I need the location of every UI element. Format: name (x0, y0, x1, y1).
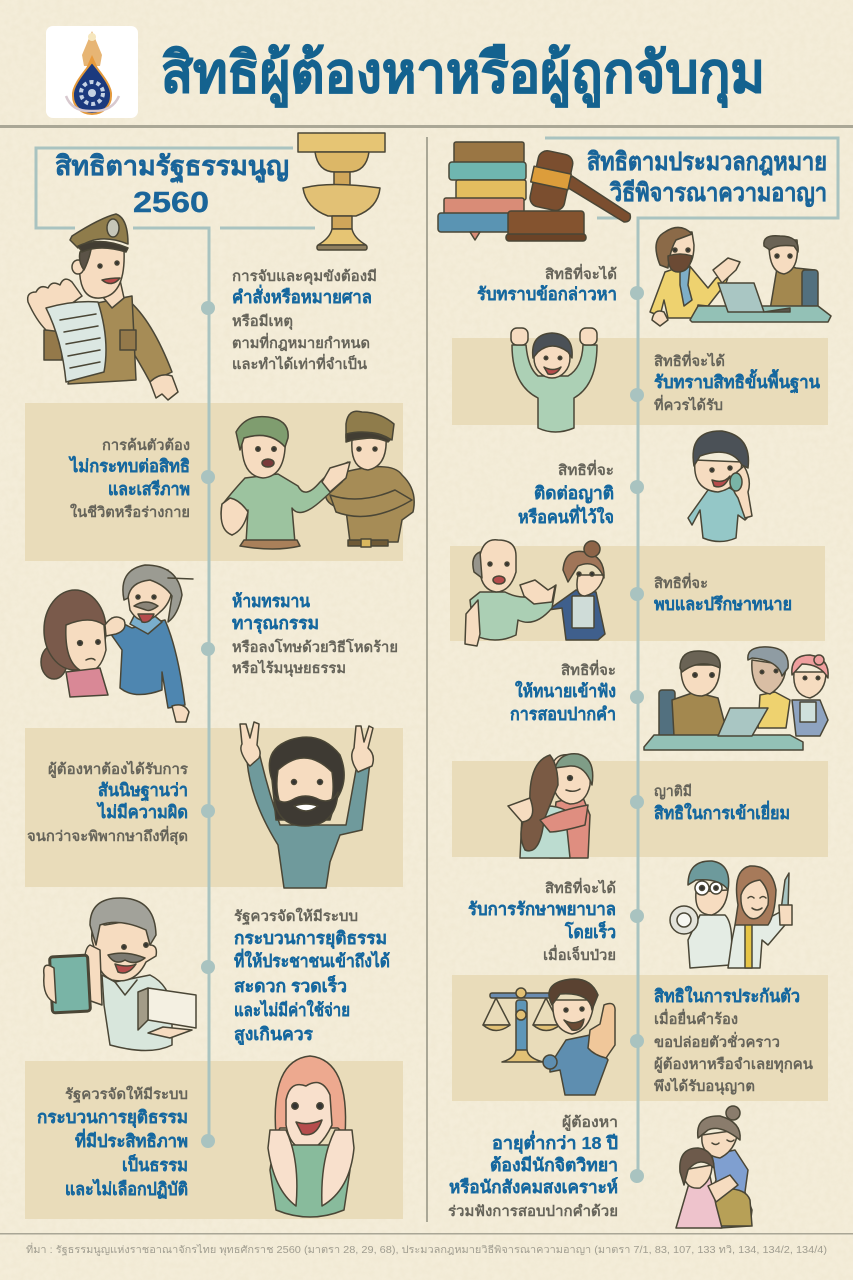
text: ผู้ต้องหาหรือจำเลยทุกคน (654, 1056, 813, 1073)
text: ให้ทนายเข้าฟัง (515, 680, 616, 701)
text: ต้องมีนักจิตวิทยา (490, 1155, 618, 1175)
panel: right 8 bail (483, 979, 813, 1095)
panel: item 2 search (68, 411, 414, 549)
text: เมื่อเจ็บป่วย (543, 944, 616, 964)
text: หรือนักสังคมสงเคราะห์ (449, 1176, 618, 1197)
text: สิทธิที่จะได้ (654, 350, 725, 370)
text: เมื่อยื่นคำร้อง (654, 1008, 738, 1028)
heading: constitution 2560: สิทธิตามรัฐธรรมนูญ (55, 151, 289, 184)
text: และทำได้เท่าที่จำเป็น (232, 353, 367, 373)
text: สิทธิที่จะ (654, 572, 708, 592)
text: กระบวนการยุติธรรม (37, 1107, 188, 1128)
text (448, 1114, 618, 1220)
text: สะดวก รวดเร็ว (234, 974, 347, 996)
text (654, 572, 792, 614)
text: ขอปล่อยตัวชั่วคราว (654, 1031, 780, 1051)
text: สิทธิที่จะ (558, 459, 614, 479)
panel: right 1 informed of charges (477, 227, 831, 326)
text: สิทธิที่จะได้ (545, 877, 616, 897)
text: ไม่มีความผิด (96, 801, 188, 822)
illustration: man talking to police officer (221, 411, 414, 549)
timeline: criminal procedure (545, 138, 838, 1183)
illustration: smiling woman resting on hands (268, 1056, 354, 1217)
panel: item 6 efficient justice (37, 1056, 354, 1217)
panel: item 4 presumption of innocence (27, 722, 373, 888)
illustration: mother hugging child (676, 1106, 752, 1228)
illustration: man on telephone (688, 431, 752, 542)
heading: constitution 2560: 2560 (133, 187, 209, 219)
text: สิทธิที่จะ (561, 659, 616, 679)
panel: item 3 torture prohibited (41, 565, 398, 722)
heading: criminal procedure code (587, 148, 827, 207)
text: กระบวนการยุติธรรม (234, 928, 387, 949)
panel: right 6 visiting right (508, 754, 790, 858)
panel: item 1 arrest warrant (28, 214, 377, 400)
text: รัฐควรจัดให้มีระบบ (234, 907, 358, 926)
text: สิทธิในการเข้าเยี่ยม (654, 800, 790, 823)
illustration: doctor and nurse (670, 861, 792, 968)
text (27, 760, 188, 845)
text: อายุต่ำกว่า 18 ปี (492, 1130, 618, 1154)
text (654, 985, 813, 1095)
text: การจับและคุมขังต้องมี (232, 268, 377, 285)
text (468, 877, 616, 964)
illustration: cheering man (511, 328, 597, 432)
text: รับทราบสิทธิขั้นพื้นฐาน (654, 369, 820, 394)
text: ห้ามทรมาน (232, 591, 310, 611)
illustration: bearded man and officer with laptop (650, 227, 831, 326)
text (37, 1085, 188, 1199)
text (232, 268, 377, 373)
text: ทารุณกรรม (232, 613, 319, 634)
text: หรือคนที่ไว้ใจ (518, 504, 614, 527)
text (232, 591, 398, 677)
text (477, 263, 617, 304)
text (68, 437, 190, 521)
text: หรือไร้มนุษยธรรม (232, 659, 346, 677)
text: การสอบปากคำ (510, 704, 616, 724)
illustration: hugging couple (508, 754, 593, 858)
text: รัฐควรจัดให้มีระบบ (65, 1085, 188, 1104)
timeline: constitution (36, 148, 315, 1148)
panel: right 3 contact relatives (518, 431, 752, 542)
illustration: scales of justice and man thumbs up (483, 979, 615, 1095)
panel: right 5 lawyer present (510, 647, 828, 750)
text: และไม่มีค่าใช้จ่าย (234, 999, 350, 1020)
text: และเสรีภาพ (108, 479, 190, 499)
text: การค้นตัวต้อง (102, 437, 190, 454)
text (234, 907, 390, 1046)
text: ที่ให้ประชาชนเข้าถึงได้ (234, 948, 390, 971)
text: ร่วมฟังการสอบปากคำด้วย (448, 1203, 618, 1220)
illustration: officer taking statement from couple (644, 647, 828, 750)
text: ผู้ต้องหาต้องได้รับการ (48, 760, 188, 778)
text: พึงได้รับอนุญาต (654, 1077, 755, 1095)
bands (25, 338, 828, 1219)
text (510, 659, 616, 724)
text: และไม่เลือกปฏิบัติ (65, 1178, 188, 1199)
logo (46, 26, 138, 118)
icon: law books and gavel (438, 142, 630, 241)
text: สิทธิในการประกันตัว (654, 985, 800, 1006)
panel: right 4 meet lawyer (465, 540, 792, 646)
source note: ที่มา : รัฐธรรมนูญแห่งราชอาณาจักรไทย พุทธศักราช 2560 (มาตรา 28, 29, 68), ประมวลกฎหมายวิธีพิจารณาความอาญา (มาตรา 7/1, 83, 107, 133 ทวิ, 134, 134/2, 134/4) (26, 1242, 827, 1256)
text: โดยเร็ว (564, 920, 616, 942)
text: จนกว่าจะพิพากษาถึงที่สุด (27, 825, 188, 845)
panel: right 7 medical treatment (468, 861, 792, 968)
text: สูงเกินควร (234, 1024, 314, 1046)
illustration: police officer holding warrant (28, 214, 178, 400)
illustration: bald man and lawyer (465, 540, 605, 646)
text: คำสั่งหรือหมายศาล (232, 284, 372, 307)
text: ติดต่อญาติ (534, 483, 614, 504)
text: พบและปรึกษาทนาย (654, 594, 792, 614)
text (654, 350, 820, 414)
illustration: man pinching woman's cheek (41, 565, 193, 722)
illustration: bearded man raising peace signs (240, 722, 373, 888)
text: ที่มีประสิทธิภาพ (75, 1128, 188, 1151)
heading: constitution 2560 (55, 151, 289, 219)
text (654, 783, 790, 823)
title: สิทธิผู้ต้องหาหรือผู้ถูกจับกุม (161, 41, 765, 108)
text: รับทราบข้อกล่าวหา (477, 284, 617, 304)
text: ไม่กระทบต่อสิทธิ (68, 455, 190, 476)
text: ตามที่กฎหมายกำหนด (232, 332, 370, 352)
text: ผู้ต้องหา (562, 1114, 618, 1131)
text: รับการรักษาพยาบาล (468, 899, 616, 919)
panel: right 9 juvenile (448, 1106, 752, 1228)
text: เป็นธรรม (122, 1153, 188, 1175)
icon: constitution pedestal (298, 133, 385, 250)
panel: item 5 accessible justice (44, 898, 390, 1050)
text: ในชีวิตหรือร่างกาย (70, 503, 190, 521)
text: หรือลงโทษด้วยวิธีโหดร้าย (232, 638, 398, 656)
illustration: old man with tablet and parcel (44, 898, 196, 1050)
text: สันนิษฐานว่า (98, 780, 188, 802)
text (518, 459, 614, 527)
text: ที่ควรได้รับ (654, 394, 723, 414)
text: สิทธิที่จะได้ (545, 263, 617, 283)
panel: right 2 basic rights (511, 328, 820, 432)
text: ญาติมี (654, 783, 692, 800)
text: หรือมีเหตุ (232, 313, 293, 330)
